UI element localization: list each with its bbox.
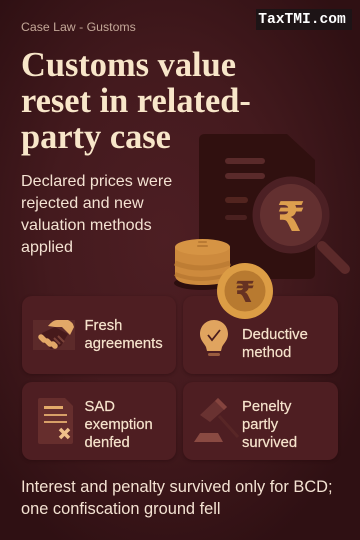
label: Penelty — [242, 399, 291, 415]
panel: SAD exemption denied — [22, 382, 176, 460]
label: SAD — [84, 399, 115, 415]
label — [242, 327, 308, 361]
title — [21, 46, 251, 156]
panel: penalty partly survived — [183, 382, 338, 460]
label: agreements — [84, 336, 163, 352]
text block: summary: Declared prices were — [21, 172, 172, 190]
title: Customs value — [21, 46, 236, 84]
text block: conclusion — [21, 478, 333, 518]
icon: handshake — [33, 320, 75, 350]
icon: magnifier with rupee: ₹ — [277, 193, 305, 241]
panel: fresh agreements — [22, 296, 176, 374]
icon: gavel — [194, 398, 238, 442]
text block: summary: valuation methods — [21, 216, 152, 234]
icon: document — [199, 134, 315, 279]
label: exemption — [84, 417, 153, 433]
label: Fresh — [84, 318, 122, 334]
icon: bulb with check — [200, 320, 228, 356]
label: denfed — [84, 435, 130, 451]
label: Deductive — [242, 327, 308, 343]
label: partly — [242, 417, 278, 433]
title: party case — [21, 118, 171, 156]
text block: summary: rejected and new — [21, 194, 144, 212]
icon: rupee coin: ₹ — [235, 275, 255, 309]
text block: conclusion: one confiscation ground fell — [21, 500, 221, 518]
text block: summary: applied — [21, 238, 73, 256]
label — [84, 318, 163, 352]
icon: coin stack — [174, 239, 230, 290]
icon: document with cross — [38, 398, 73, 444]
badge: TaxTMI logo: TaxTMI.com — [258, 12, 346, 28]
badge: TaxTMI logo — [256, 9, 352, 30]
label: method — [242, 345, 291, 361]
panel: deductive method — [183, 296, 338, 374]
eyebrow: category label: Case Law - Gustoms — [21, 20, 136, 34]
title: reset in related- — [21, 82, 251, 120]
icon: magnifier with rupee — [252, 176, 345, 269]
icon: rupee coin — [217, 263, 273, 319]
text block: summary — [21, 172, 172, 256]
text block: conclusion: Interest and penalty survived only for BCD; — [21, 478, 333, 496]
label — [84, 399, 153, 451]
label: survived — [242, 435, 297, 451]
label — [242, 399, 297, 451]
